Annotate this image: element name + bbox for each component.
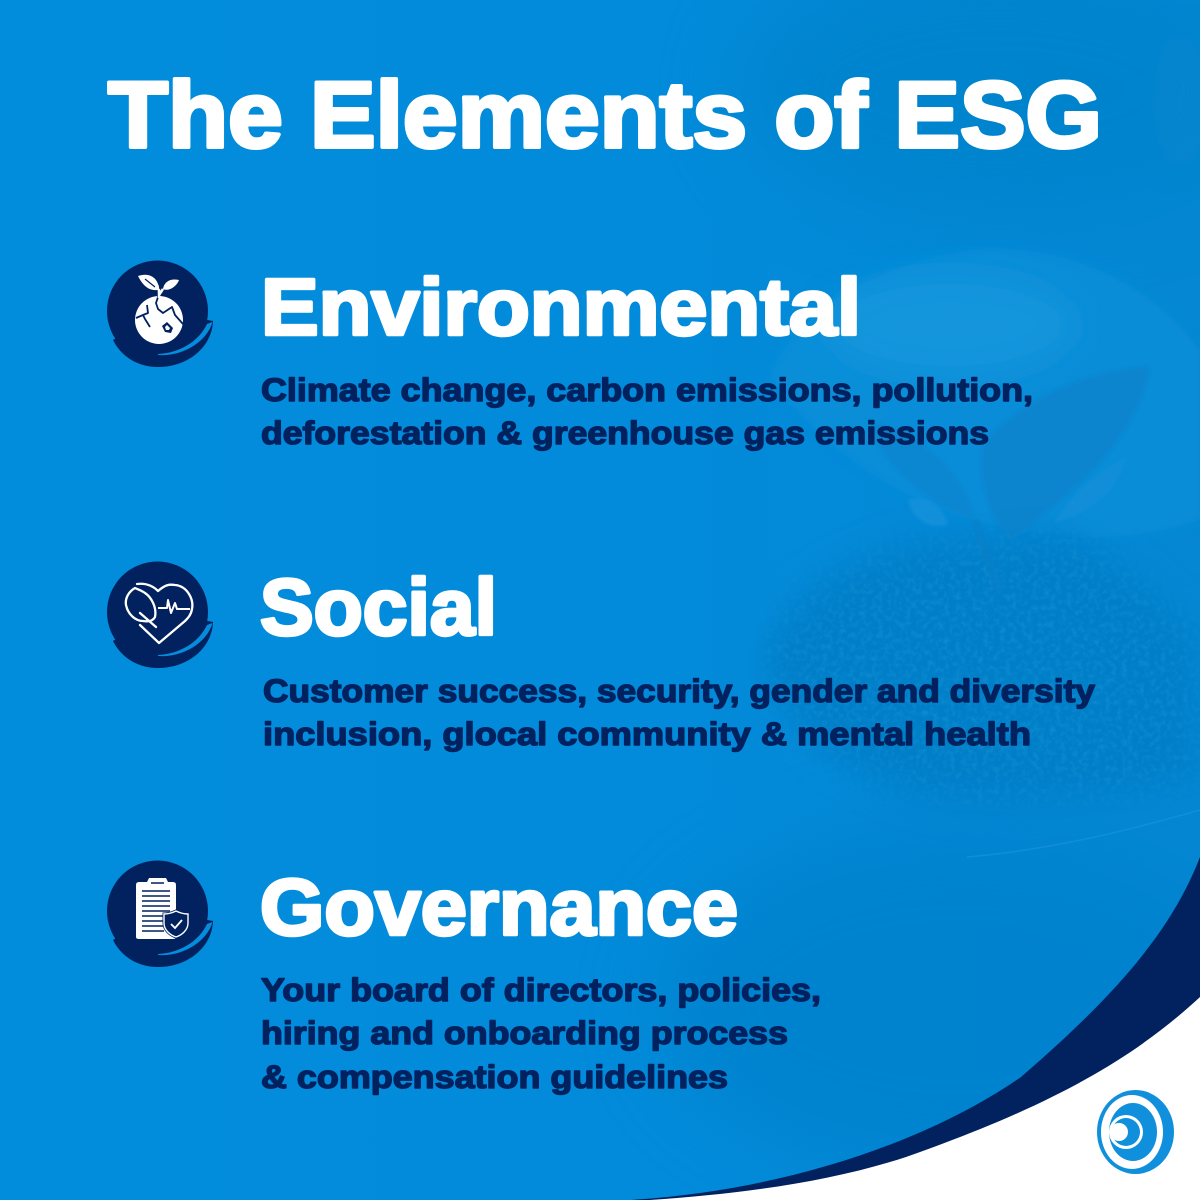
- section: governance: [107, 860, 821, 1095]
- body text: environmental: Climate change, carbon emissions, pollution,: [261, 372, 1033, 408]
- earth globe: [135, 296, 183, 344]
- corner swoosh: navy band: [630, 857, 1200, 1200]
- body text: environmental: [261, 372, 1033, 451]
- section: environmental: [107, 260, 1033, 451]
- logo: spiral circle: [1097, 1090, 1174, 1174]
- corner swoosh: white corner: [650, 997, 1200, 1200]
- section: social: [107, 562, 1095, 752]
- icon: earth with sprout: [107, 260, 213, 367]
- title: The Elements of ESG: [108, 62, 1102, 167]
- body text: governance: & compensation guidelines: [261, 1059, 728, 1095]
- icon: clipboard with shield: [107, 860, 213, 967]
- body text: environmental: deforestation & greenhouse gas emissions: [261, 415, 989, 451]
- body text: governance: Your board of directors, policies,: [261, 972, 821, 1008]
- heading: social: Social: [260, 562, 497, 652]
- earth continents lines: [136, 290, 183, 327]
- body text: social: inclusion, glocal community & mental health: [263, 716, 1031, 752]
- body text: governance: hiring and onboarding process: [261, 1015, 788, 1051]
- sprout leaves: [138, 275, 179, 290]
- heading: environmental: Environmental: [261, 262, 861, 352]
- icon: heart with leaf and pulse: [107, 562, 213, 668]
- body text: social: Customer success, security, gender and diversity: [263, 673, 1095, 709]
- background photo: seedling in soil: [660, 0, 1200, 1170]
- body text: governance: [261, 972, 821, 1095]
- heading: governance: Governance: [260, 862, 738, 952]
- body text: social: [263, 673, 1095, 752]
